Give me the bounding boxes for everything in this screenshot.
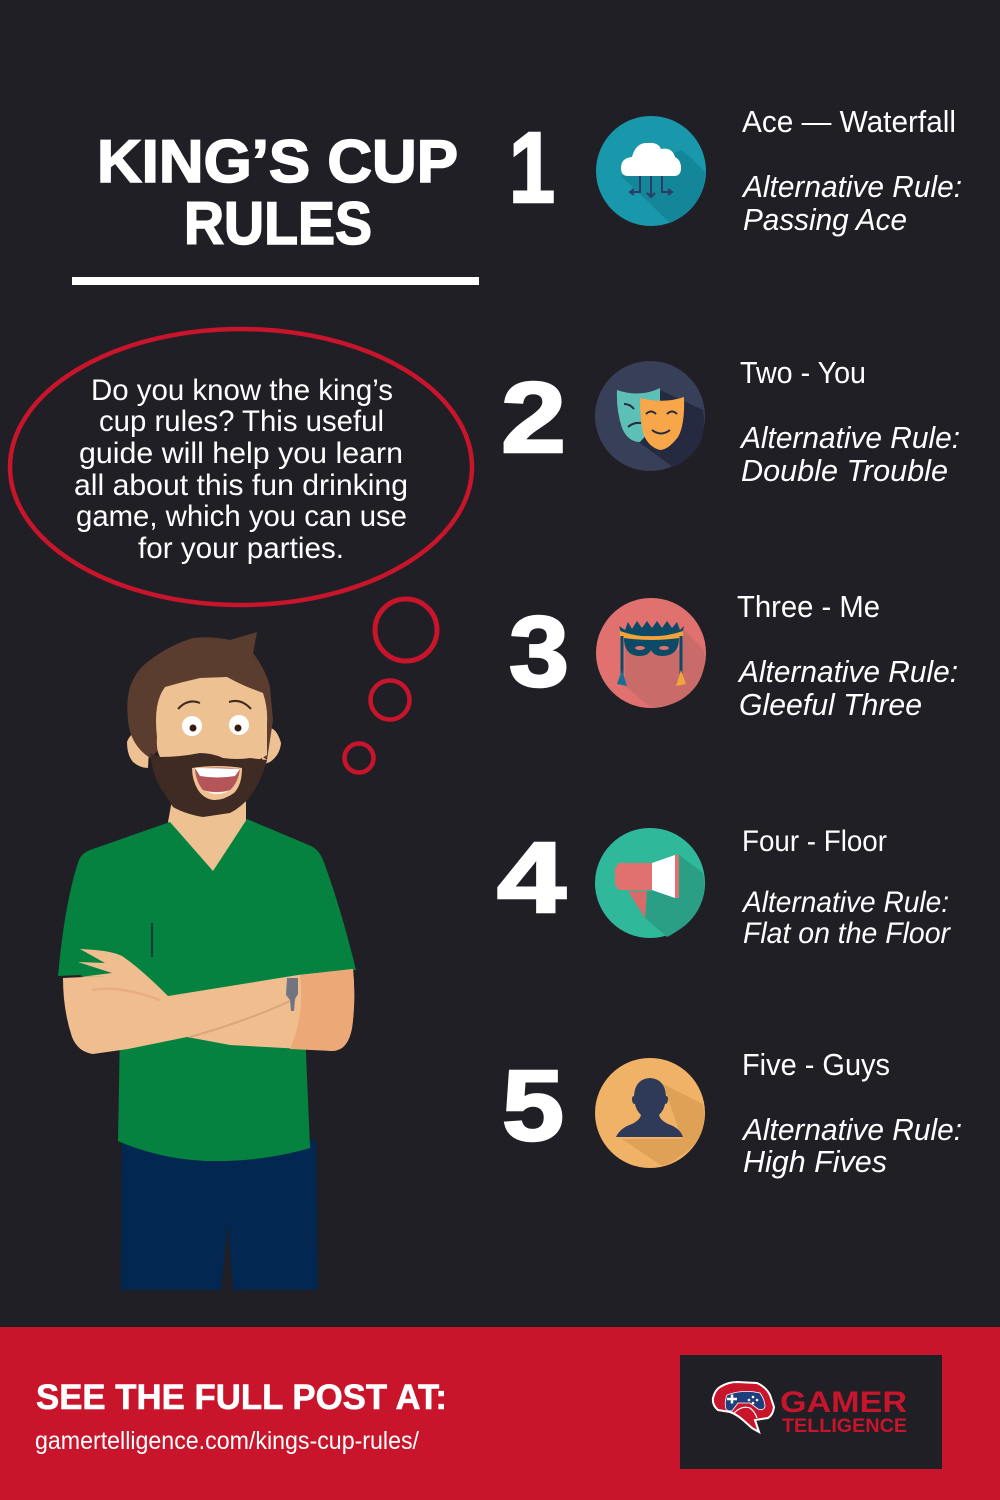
rule 3 bbox=[509, 589, 958, 722]
face bbox=[156, 677, 267, 765]
rule 3: Alternative Rule: bbox=[737, 654, 958, 689]
shirt bbox=[58, 819, 356, 1161]
speech bubble: guide will help you learn bbox=[79, 437, 403, 470]
rule 2 bbox=[501, 355, 960, 488]
icon: megaphone bbox=[595, 828, 705, 938]
footer url: gamertelligence.com/kings-cup-rules/ bbox=[35, 1427, 419, 1455]
text: Ace — Waterfall bbox=[742, 104, 956, 139]
beard bbox=[150, 753, 267, 817]
rule 5: Alternative Rule: bbox=[741, 1112, 962, 1147]
title: RULES bbox=[184, 190, 372, 257]
rule 5: High Fives bbox=[743, 1144, 887, 1179]
icon: carnival mask bbox=[596, 598, 706, 708]
speech bubble: cup rules? This useful bbox=[99, 405, 384, 438]
mouth bbox=[192, 766, 242, 800]
rule 1: Alternative Rule: bbox=[741, 169, 962, 204]
rule 3: Gleeful Three bbox=[739, 687, 922, 722]
rule 5 bbox=[502, 1047, 962, 1179]
text: Three - Me bbox=[737, 589, 880, 624]
neck bbox=[168, 800, 246, 872]
rule 1 bbox=[509, 104, 962, 237]
speech bubble: for your parties. bbox=[138, 532, 344, 565]
icon: person bbox=[595, 1058, 705, 1168]
rule 4: Alternative Rule: bbox=[741, 886, 949, 919]
number 4: 4 bbox=[497, 822, 566, 934]
title bbox=[97, 128, 458, 257]
number 2: 2 bbox=[501, 362, 566, 474]
logo: GAMER bbox=[780, 1386, 907, 1419]
speech bubble bbox=[10, 329, 472, 605]
text: Two - You bbox=[740, 355, 866, 390]
rule 4: Flat on the Floor bbox=[743, 917, 951, 950]
text: Five - Guys bbox=[742, 1047, 890, 1082]
crossed arms bbox=[63, 949, 354, 1054]
number 5: 5 bbox=[502, 1050, 564, 1162]
logo brain bbox=[713, 1382, 774, 1432]
icon: cloud bbox=[596, 116, 706, 226]
character illustration bbox=[58, 632, 356, 1290]
footer banner bbox=[0, 1327, 1000, 1500]
rule 1: Passing Ace bbox=[743, 202, 907, 237]
eyes bbox=[182, 716, 202, 736]
number 3: 3 bbox=[509, 596, 569, 708]
rule 2: Alternative Rule: bbox=[739, 420, 960, 455]
thought bubbles bbox=[344, 599, 437, 772]
watch bbox=[286, 978, 298, 1011]
logo bbox=[680, 1355, 942, 1469]
title: KING’S CUP bbox=[97, 128, 458, 195]
ears bbox=[127, 731, 150, 768]
speech bubble: all about this fun drinking bbox=[74, 469, 408, 502]
text: Four - Floor bbox=[742, 825, 887, 858]
trousers bbox=[121, 1140, 318, 1290]
number 1: 1 bbox=[509, 112, 555, 224]
rule 4 bbox=[497, 822, 951, 950]
icon: theatre masks bbox=[595, 361, 705, 471]
speech bubble: Do you know the king’s bbox=[91, 374, 393, 407]
logo: TELLIGENCE bbox=[782, 1416, 907, 1437]
hair bbox=[127, 632, 273, 760]
rule 2: Double Trouble bbox=[741, 453, 948, 488]
speech bubble: game, which you can use bbox=[76, 500, 407, 533]
footer heading: SEE THE FULL POST AT: bbox=[36, 1378, 447, 1417]
